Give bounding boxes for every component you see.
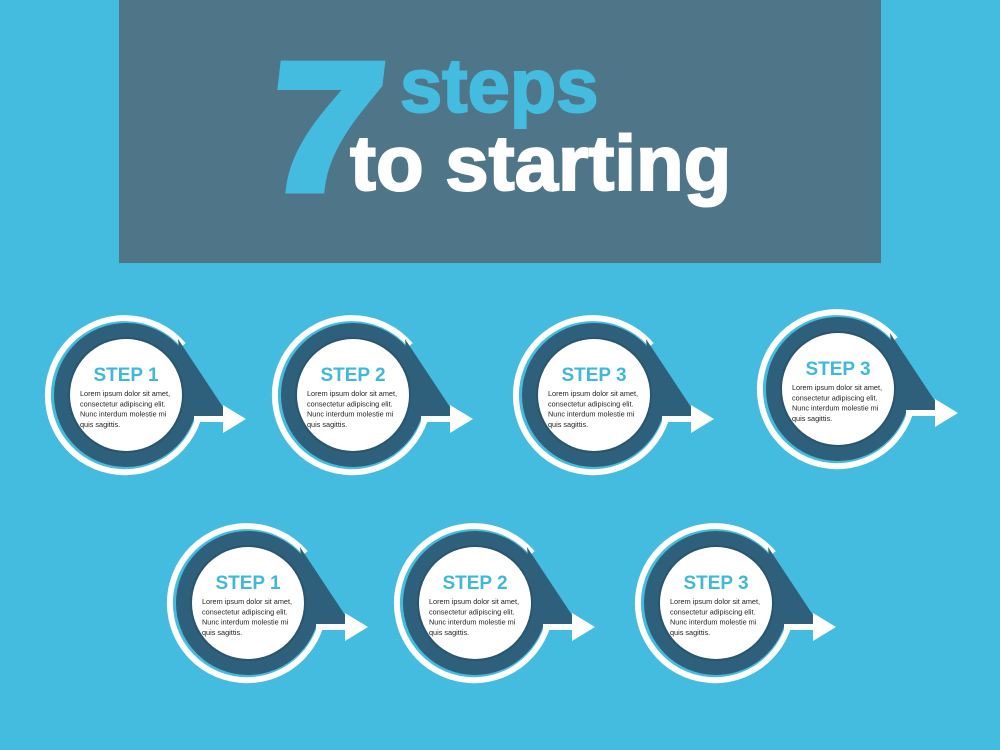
step 3 row2 <box>638 526 836 680</box>
step 3 row1 <box>516 318 714 472</box>
step 3 row2: Nunc interdum molestie mi <box>670 618 757 627</box>
step 1 row2: quis sagittis. <box>202 628 242 637</box>
step 3 row2: STEP 3 <box>683 573 749 594</box>
step 1 row1: consectetur adipiscing elit. <box>80 399 166 408</box>
step 3 row2: consectetur adipiscing elit. <box>670 607 756 616</box>
step 1 row1: Nunc interdum molestie mi <box>80 410 167 419</box>
title panel <box>119 0 881 263</box>
step 2 row1 <box>275 318 473 472</box>
step 2 row1: Nunc interdum molestie mi <box>307 410 394 419</box>
title words to starting: to starting <box>350 119 731 207</box>
step 2 row2: Lorem ipsum dolor sit amet, <box>429 597 519 606</box>
step 3 row1: Lorem ipsum dolor sit amet, <box>548 389 638 398</box>
step 4 row1: STEP 3 <box>805 359 871 380</box>
step 2 row2: STEP 2 <box>442 573 508 594</box>
step 1 row2: consectetur adipiscing elit. <box>202 607 288 616</box>
step 1 row1 <box>48 318 246 472</box>
step 1 row2 <box>170 526 368 680</box>
step 2 row1: STEP 2 <box>320 365 386 386</box>
step 2 row2: Nunc interdum molestie mi <box>429 618 516 627</box>
title word steps: steps <box>400 44 599 129</box>
step 2 row1: quis sagittis. <box>307 420 347 429</box>
step 1 row1: quis sagittis. <box>80 420 120 429</box>
step 1 row1: STEP 1 <box>93 365 159 386</box>
step 2 row2 <box>397 526 595 680</box>
step 4 row1: Lorem ipsum dolor sit amet, <box>792 383 882 392</box>
step 3 row1: Nunc interdum molestie mi <box>548 410 635 419</box>
step 3 row1: quis sagittis. <box>548 420 588 429</box>
step 4 row1 <box>760 312 958 466</box>
step 3 row1: consectetur adipiscing elit. <box>548 399 634 408</box>
step 3 row2: quis sagittis. <box>670 628 710 637</box>
step 4 row1: consectetur adipiscing elit. <box>792 393 878 402</box>
step 4 row1: Nunc interdum molestie mi <box>792 404 879 413</box>
step 1 row1: Lorem ipsum dolor sit amet, <box>80 389 170 398</box>
step 1 row2: Nunc interdum molestie mi <box>202 618 289 627</box>
step 2 row2: quis sagittis. <box>429 628 469 637</box>
step 1 row2: Lorem ipsum dolor sit amet, <box>202 597 292 606</box>
step 1 row2: STEP 1 <box>215 573 281 594</box>
title number 7: 7 <box>257 26 393 227</box>
step 2 row2: consectetur adipiscing elit. <box>429 607 515 616</box>
step 3 row2: Lorem ipsum dolor sit amet, <box>670 597 760 606</box>
step 4 row1: quis sagittis. <box>792 414 832 423</box>
step 2 row1: Lorem ipsum dolor sit amet, <box>307 389 397 398</box>
step 2 row1: consectetur adipiscing elit. <box>307 399 393 408</box>
step 3 row1: STEP 3 <box>561 365 627 386</box>
